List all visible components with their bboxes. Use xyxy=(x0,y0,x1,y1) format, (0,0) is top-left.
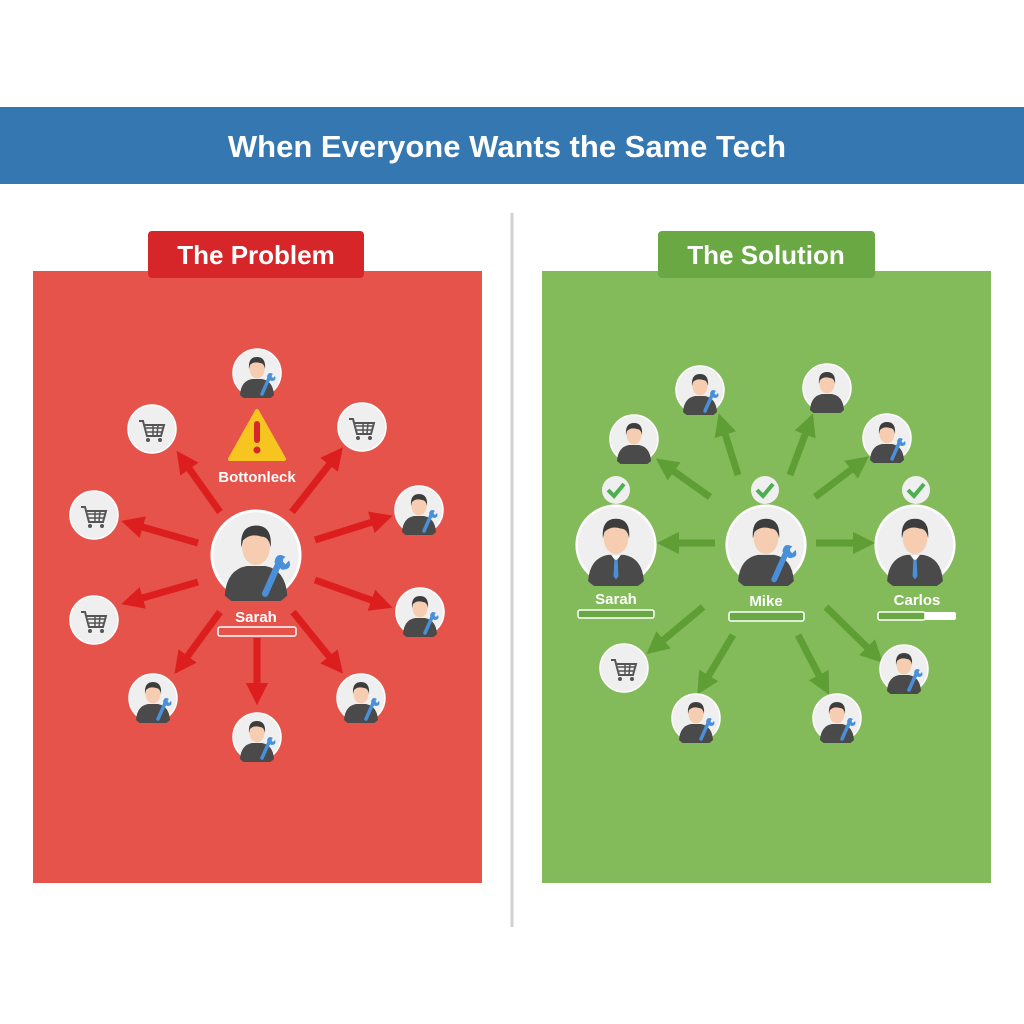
node: Mike: Mike xyxy=(749,593,783,610)
node: Mike xyxy=(727,476,805,621)
node: Sarah overloaded xyxy=(212,511,300,636)
heading: The Problem xyxy=(148,231,364,278)
arrows: distributed xyxy=(655,424,875,685)
heading: The Solution: The Solution xyxy=(687,240,845,270)
icon: warning bottleneck: Bottonleck xyxy=(218,469,296,486)
node: Sarah overloaded: Sarah xyxy=(235,609,277,626)
icon: warning bottleneck xyxy=(218,411,296,486)
node: Sarah xyxy=(577,476,655,618)
heading: The Solution xyxy=(658,231,875,278)
header banner: When Everyone Wants the Same Tech xyxy=(228,129,786,164)
heading: The Problem: The Problem xyxy=(177,240,335,270)
panel: problem xyxy=(33,231,482,883)
node: Sarah: Sarah xyxy=(595,591,637,608)
requesters xyxy=(600,364,928,747)
panel: solution xyxy=(542,231,991,883)
arrows: overload from Sarah xyxy=(132,456,382,694)
node: Carlos xyxy=(876,476,956,620)
node: Carlos: Carlos xyxy=(894,592,940,609)
requesters xyxy=(70,349,444,766)
header banner xyxy=(0,107,1024,184)
